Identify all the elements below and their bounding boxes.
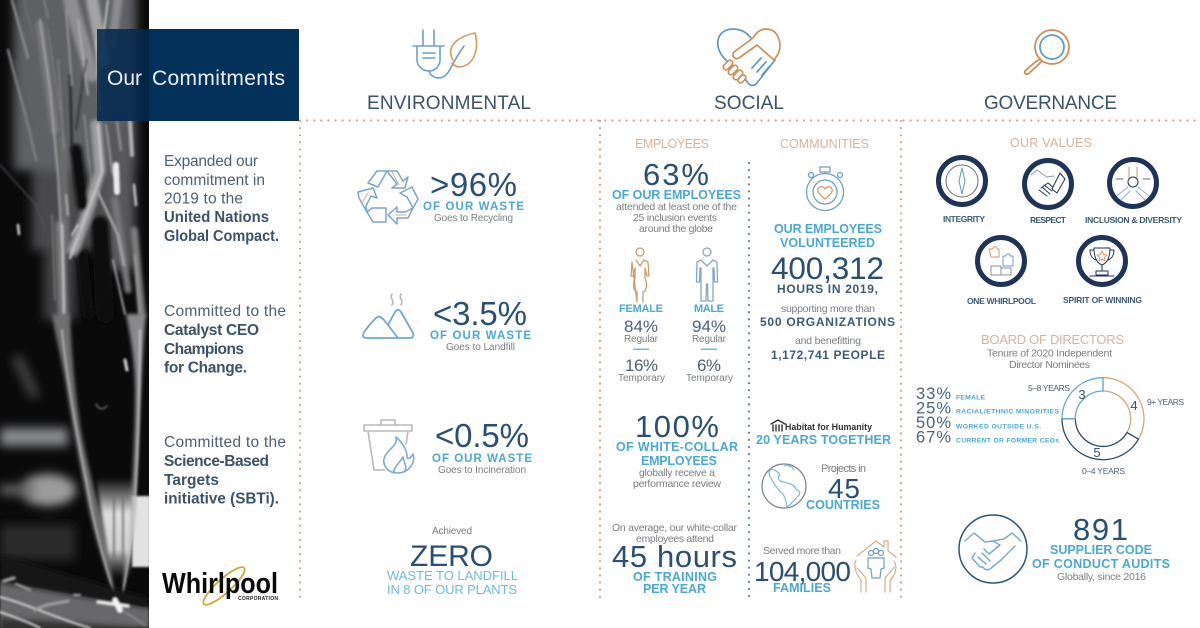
- commitment: united nations: United Nations: [164, 209, 269, 226]
- icon: family in hands: [855, 541, 896, 592]
- icon: recycle: [358, 171, 418, 224]
- commitment: science-based targets: [164, 434, 286, 508]
- heading: our values: OUR VALUES: [1010, 136, 1092, 150]
- stat: 104,000 families: 104,000: [754, 556, 851, 587]
- stat: recycling: [358, 166, 524, 224]
- commitment: science-based targets: Targets: [164, 472, 219, 489]
- stat: supplier audits: OF CONDUCT AUDITS: [1032, 557, 1170, 571]
- stat: 100% performance review: [616, 409, 738, 490]
- logo: whirlpool: CORPORATION: [238, 596, 278, 602]
- stat: landfill: <3.5%: [433, 295, 527, 332]
- stat: volunteering: 1,172,741 PEOPLE: [771, 348, 885, 362]
- icon: puzzle pieces: [978, 238, 1024, 284]
- value: one whirlpool: ONE WHIRLPOOL: [967, 296, 1036, 306]
- stat: 63% inclusion events: attended at least one of the: [616, 201, 737, 213]
- board statistics list: 25%: [916, 400, 951, 418]
- stat: 45 countries: COUNTRIES: [806, 498, 880, 512]
- commitment: catalyst: for Change.: [164, 360, 247, 376]
- board statistics list: [916, 385, 1059, 446]
- stat: landfill: Goes to Landfill: [446, 342, 515, 353]
- stat: incineration: [364, 417, 532, 476]
- panel: our commitments title box: [97, 29, 299, 121]
- board statistics list: RACIAL/ETHNIC MINORITIES: [956, 408, 1059, 416]
- female employees: 84%: [624, 317, 658, 336]
- male employees: MALE: [694, 303, 724, 315]
- chart: director tenure donut: 3: [1078, 387, 1086, 402]
- stat: 45 countries: Projects in: [821, 463, 866, 475]
- icon: globe: [762, 464, 806, 508]
- icon: handshake: [1024, 160, 1072, 208]
- heading: board of directors: Tenure of 2020 Independent: [987, 348, 1112, 360]
- value: spirit of winning: [1063, 238, 1142, 305]
- heading: environmental: ENVIRONMENTAL: [367, 93, 531, 114]
- male employees: [686, 248, 733, 384]
- chart: director tenure donut: 4: [1130, 398, 1138, 413]
- icon: trophy: [1078, 238, 1126, 284]
- value: inclusion and diversity: [1085, 160, 1182, 225]
- female employees: [618, 248, 665, 384]
- commitment: science-based targets: Science-Based: [164, 453, 269, 470]
- heading: board of directors: BOARD OF DIRECTORS: [981, 332, 1124, 347]
- board statistics list: FEMALE: [956, 394, 985, 402]
- stat: 45 hours training: employees attend: [636, 533, 714, 545]
- photo: water stream: [0, 0, 150, 628]
- icon: stopwatch heart: [806, 167, 844, 210]
- stat: volunteering: OUR EMPLOYEES: [774, 222, 882, 236]
- female employees: 16%: [625, 356, 658, 375]
- commitment: united nations: Global Compact.: [164, 228, 279, 245]
- icon: compass: [938, 158, 986, 204]
- stat: recycling: >96%: [430, 166, 517, 203]
- stat: 100% performance review: 100%: [635, 409, 719, 444]
- commitment: catalyst: [164, 303, 286, 376]
- stat: 45 hours training: On average, our white-collar: [612, 522, 738, 534]
- chart: director tenure donut: 9+ YEARS: [1147, 397, 1184, 407]
- female employees: Regular: [624, 334, 659, 345]
- dotted section dividers: [300, 120, 1200, 603]
- stat: 63% inclusion events: 63%: [643, 157, 709, 192]
- stat: volunteering: and benefitting: [795, 335, 861, 347]
- stat: incineration: OF OUR WASTE: [432, 453, 532, 465]
- heading: board of directors: [981, 332, 1124, 371]
- male employees: Regular: [692, 334, 727, 345]
- commitment: catalyst: Committed to the: [164, 303, 286, 320]
- stat: recycling: OF OUR WASTE: [423, 201, 524, 213]
- stat: volunteering: [760, 167, 895, 362]
- logo: habitat for humanity: [771, 420, 873, 433]
- stat: 63% inclusion events: around the globe: [639, 223, 713, 235]
- stat: 100% performance review: OF WHITE-COLLAR: [616, 440, 738, 454]
- stat: 45 hours training: [612, 522, 738, 596]
- stat: incineration: Goes to Incineration: [438, 465, 526, 476]
- value: integrity: [938, 158, 986, 224]
- icon: joined hands: [1110, 160, 1156, 206]
- female employees: Temporary: [618, 373, 665, 384]
- commitment: united nations: [164, 153, 279, 245]
- stat: zero waste to landfill: WASTE TO LANDFILL: [387, 568, 518, 583]
- stat: 45 countries: 45: [828, 473, 860, 504]
- value: respect: RESPECT: [1030, 215, 1067, 225]
- stat: 63% inclusion events: 25 inclusion events: [633, 212, 717, 224]
- commitment: science-based targets: Committed to the: [164, 434, 286, 451]
- stat: zero waste to landfill: ZERO: [410, 540, 493, 573]
- logo: whirlpool: Whirlpool: [162, 568, 278, 600]
- value: one whirlpool: [967, 238, 1036, 306]
- icon: handshake in circle: [959, 515, 1027, 583]
- icon: heart handshake: [718, 29, 780, 85]
- logo: habitat for humanity: Habitat for Humanity: [785, 422, 873, 433]
- male employees: Temporary: [686, 373, 733, 384]
- value: inclusion and diversity: INCLUSION & DIVERSITY: [1085, 215, 1182, 225]
- commitment: united nations: Expanded our: [164, 153, 258, 170]
- stat: supplier audits: 891: [1073, 512, 1128, 547]
- stat: 45 hours training: OF TRAINING: [633, 570, 717, 584]
- icon: mountains and steam: [363, 294, 413, 338]
- title: our commitments: Commitments: [152, 67, 285, 90]
- commitment: catalyst: Champions: [164, 341, 244, 358]
- stat: volunteering: VOLUNTEERED: [780, 236, 875, 250]
- stat: 63% inclusion events: OF OUR EMPLOYEES: [612, 188, 741, 202]
- stat: 100% performance review: EMPLOYEES: [641, 454, 717, 468]
- stat: 100% performance review: globally receive a: [639, 467, 715, 479]
- stat: incineration: <0.5%: [435, 417, 529, 454]
- chart: director tenure donut: 5: [1093, 445, 1101, 460]
- stat: 45 hours training: 45 hours: [612, 539, 737, 574]
- stat: landfill: [363, 294, 531, 353]
- stat: volunteering: HOURS IN 2019,: [777, 282, 878, 296]
- heading: governance: GOVERNANCE: [984, 93, 1117, 114]
- stat: 104,000 families: [754, 541, 896, 595]
- commitment: science-based targets: initiative (SBTi).: [164, 490, 279, 508]
- commitment: united nations: commitment in: [164, 172, 265, 189]
- stat: zero waste to landfill: IN 8 OF OUR PLANTS: [387, 582, 517, 597]
- stat: 45 countries: [762, 463, 880, 512]
- stat: volunteering: 400,312: [771, 250, 884, 286]
- icon: magnifier: [1025, 30, 1069, 74]
- commitment: catalyst: Catalyst CEO: [164, 322, 259, 339]
- board statistics list: 50%: [916, 414, 951, 432]
- stat: volunteering: supporting more than: [781, 303, 875, 315]
- chart: director tenure donut: 5–8 YEARS: [1028, 383, 1070, 393]
- stat: 104,000 families: Served more than: [763, 545, 841, 557]
- stat: 63% inclusion events: [612, 157, 741, 235]
- stat: zero waste to landfill: [387, 526, 518, 597]
- logo: whirlpool: [162, 563, 278, 609]
- chart: director tenure donut: 0–4 YEARS: [1082, 466, 1125, 476]
- stat: supplier audits: SUPPLIER CODE: [1050, 543, 1152, 557]
- icon: trash bin and flame: [364, 420, 414, 473]
- heading: employees: EMPLOYEES: [635, 137, 709, 151]
- icon: plug and leaf: [413, 30, 476, 78]
- stat: 104,000 families: FAMILIES: [773, 581, 831, 595]
- heading: communities: COMMUNITIES: [780, 137, 869, 151]
- title: our commitments: Our: [107, 67, 142, 90]
- board statistics list: WORKED OUTSIDE U.S.: [956, 424, 1041, 430]
- board statistics list: CURRENT OR FORMER CEOs: [956, 438, 1059, 444]
- stat: supplier audits: Globally, since 2016: [1057, 571, 1146, 583]
- icon: female figure: [631, 248, 649, 302]
- text block: commitments list: [164, 153, 286, 508]
- text: 20 years together: 20 YEARS TOGETHER: [756, 433, 891, 447]
- chart: director tenure donut: [1028, 378, 1184, 476]
- value: respect: [1024, 160, 1072, 225]
- female employees: FEMALE: [619, 303, 663, 315]
- stat: supplier audits: [959, 512, 1170, 583]
- stat: zero waste to landfill: Achieved: [432, 526, 472, 537]
- value: integrity: INTEGRITY: [943, 214, 985, 224]
- stat: landfill: OF OUR WASTE: [430, 330, 531, 342]
- male employees: 6%: [697, 356, 721, 375]
- male employees: 94%: [692, 317, 726, 336]
- stat: 100% performance review: performance review: [633, 478, 721, 490]
- stat: 45 hours training: PER YEAR: [643, 582, 706, 596]
- stat: recycling: Goes to Recycling: [434, 213, 513, 224]
- board statistics list: 67%: [916, 428, 951, 446]
- heading: board of directors: Director Nominees: [1009, 359, 1090, 371]
- board statistics list: 33%: [916, 385, 951, 403]
- heading: social: SOCIAL: [714, 93, 784, 114]
- value: spirit of winning: SPIRIT OF WINNING: [1063, 295, 1142, 305]
- icon: male figure: [696, 248, 718, 301]
- commitment: united nations: 2019 to the: [164, 190, 243, 208]
- stat: volunteering: 500 ORGANIZATIONS: [760, 315, 895, 329]
